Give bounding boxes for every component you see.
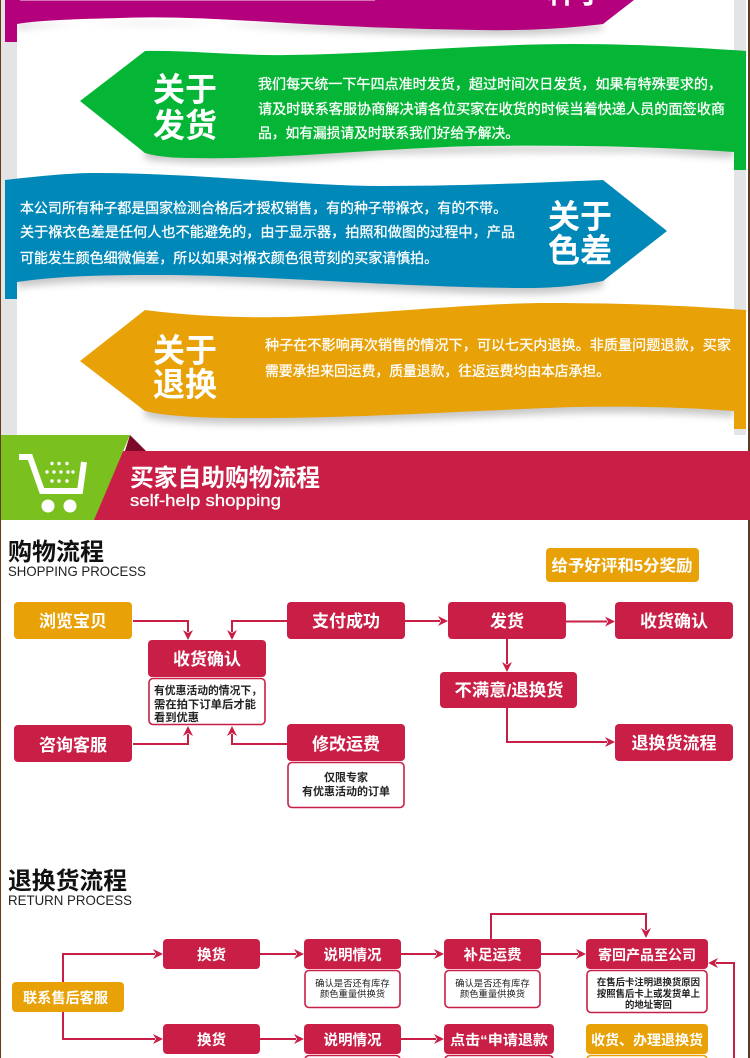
heading: return process xyxy=(8,868,132,908)
heading: about colour difference: 关于 xyxy=(548,198,612,235)
arrow: payment to confirm xyxy=(227,621,287,640)
text: shipping policy: 品，如有漏损请及时联系我们好给予解决。 xyxy=(258,125,519,141)
box: top up shipping xyxy=(444,939,541,1008)
panel: about seeds (cropped magenta banner) xyxy=(5,0,634,42)
text: colour policy: 关于褓衣色差是任何人也不能避免的，由于显示器，拍照和做图的过程中，产品 xyxy=(20,224,515,240)
box: send back: 的地址寄回 xyxy=(625,999,672,1010)
arrow: shipping to receipt xyxy=(566,616,615,626)
box: send back: 寄回产品至公司 xyxy=(598,947,696,963)
panel: about colour difference (blue banner) xyxy=(5,173,667,299)
arrows: lower row xyxy=(260,1034,444,1044)
box: shipping xyxy=(448,602,566,639)
box: edit shipping fee: 仅限专家 xyxy=(324,770,368,784)
icon: shopping cart xyxy=(19,457,84,512)
heading: about colour difference xyxy=(548,198,612,269)
box: apply for refund: 点击“申请退款 xyxy=(450,1032,548,1048)
box: contact after-sales: 联系售后客服 xyxy=(23,989,108,1007)
box: explain upper: 说明情况 xyxy=(324,946,382,964)
flowchart: shopping process xyxy=(14,548,733,808)
text: colour policy: 本公司所有种子都是国家检测合格后才授权销售，有的种子带褓衣，有的不带。 xyxy=(20,200,507,216)
box: edit shipping fee: 修改运费 xyxy=(312,735,380,754)
heading: about returns: 退换 xyxy=(153,366,217,403)
panel: about shipping (green banner) xyxy=(80,44,746,170)
text: colour policy xyxy=(20,200,515,266)
box: top up shipping: 颜色重量供换货 xyxy=(460,988,525,999)
arrow: browse to confirm xyxy=(133,621,193,640)
box: edit shipping fee xyxy=(287,724,405,808)
text: return policy: 种子在不影响再次销售的情况下，可以七天内退换。非质量问题退款，买家 xyxy=(265,337,731,353)
text: return policy xyxy=(265,337,731,379)
box: contact after-sales xyxy=(12,982,124,1012)
box: confirm with note xyxy=(148,640,266,724)
header title: 买家自助购物流程 xyxy=(130,465,320,492)
heading: about shipping: 发货 xyxy=(153,107,217,144)
heading: about returns xyxy=(153,332,217,403)
box: consult xyxy=(14,725,132,762)
box: explain upper: 确认是否还有库存 xyxy=(315,978,390,988)
box: receipt confirmation: 收货确认 xyxy=(640,611,708,631)
box: exchange upper: 换货 xyxy=(197,946,226,964)
text: return policy: 需要承担来回运费，质量退款，往返运费均由本店承担。 xyxy=(265,363,610,379)
box: receive and process xyxy=(586,1024,708,1058)
arrow: top bypass xyxy=(491,914,651,939)
box: confirm with note: 需在拍下订单后才能 xyxy=(154,697,256,711)
arrow: edit fee to note xyxy=(227,726,287,744)
box: payment success: 支付成功 xyxy=(312,611,380,631)
box: top up shipping: 确认是否还有库存 xyxy=(455,978,530,988)
box: explain lower: 说明情况 xyxy=(324,1031,382,1049)
box: payment success xyxy=(287,602,405,639)
arrow: contact to exchange xyxy=(63,949,163,982)
arrow: dissatisfied to return flow xyxy=(507,708,615,747)
box: exchange upper xyxy=(163,939,260,969)
box: receive and process: 收货、办理退换货 xyxy=(591,1032,703,1048)
heading: shopping process xyxy=(8,539,146,579)
heading: about shipping: 关于 xyxy=(153,71,217,108)
arrow: consult to note xyxy=(133,726,193,744)
text: shipping policy: 请及时联系客服协商解决请各位买家在收货的时候当着快递人员的面签收商 xyxy=(258,101,725,117)
heading: shopping process: SHOPPING PROCESS xyxy=(8,563,146,579)
box: dissatisfied xyxy=(440,672,577,708)
arrow: contact to refund xyxy=(63,1012,163,1044)
box: dissatisfied: 不满意/退换货 xyxy=(454,680,564,700)
reward badge xyxy=(546,548,699,582)
heading: about shipping xyxy=(153,71,217,144)
flowchart: return process xyxy=(12,914,734,1058)
box: browse xyxy=(14,602,132,639)
box: exchange lower xyxy=(163,1024,260,1054)
box: return flow: 退换货流程 xyxy=(632,733,716,753)
text: colour policy: 可能发生颜色细微偏差，所以如果对褓衣颜色很苛刻的买家请慎拍。 xyxy=(20,250,438,266)
arrow: payment to shipping xyxy=(405,616,448,626)
box: shipping: 发货 xyxy=(490,611,524,631)
arrows: upper row xyxy=(260,949,586,959)
heading: return process: 退换货流程 xyxy=(8,868,127,895)
arrow: shipping to dissatisfied xyxy=(502,639,512,672)
box: consult: 咨询客服 xyxy=(39,735,107,755)
box: confirm with note: 收货确认 xyxy=(173,649,241,669)
box: explain lower xyxy=(304,1024,401,1058)
text: shipping policy: 我们每天统一下午四点准时发货，超过时间次日发货，如果有特殊要求的， xyxy=(258,76,722,92)
heading: shopping process: 购物流程 xyxy=(8,539,104,566)
box: return flow xyxy=(615,724,733,761)
reward badge: 给予好评和5分奖励 xyxy=(552,556,692,575)
box: send back xyxy=(586,939,708,1012)
box: send back: 在售后卡注明退换货原因 xyxy=(597,976,700,988)
text: shipping policy xyxy=(258,76,725,141)
box: send back: 按照售后卡上或发货单上 xyxy=(597,988,700,999)
box: top up shipping: 补足运费 xyxy=(464,947,522,964)
box: exchange lower: 换货 xyxy=(197,1031,226,1049)
header subtitle: self-help shopping xyxy=(130,491,281,510)
box: apply for refund xyxy=(444,1024,554,1058)
panel: about returns (orange banner) xyxy=(80,303,746,429)
box: receipt confirmation xyxy=(615,602,733,639)
box: browse: 浏览宝贝 xyxy=(39,611,107,631)
box: confirm with note: 看到优惠 xyxy=(154,710,199,724)
box: explain upper: 颜色重量供换货 xyxy=(320,988,385,999)
box: edit shipping fee: 有优惠活动的订单 xyxy=(302,784,390,798)
box: explain upper xyxy=(304,939,401,1008)
heading: return process: RETURN PROCESS xyxy=(8,892,132,908)
section header: self-help shopping xyxy=(1,435,750,520)
heading: about colour difference: 色差 xyxy=(548,232,612,269)
heading: about returns: 关于 xyxy=(153,332,217,369)
box: confirm with note: 有优惠活动的情况下， xyxy=(154,683,262,697)
arrow: right return xyxy=(708,958,734,1058)
